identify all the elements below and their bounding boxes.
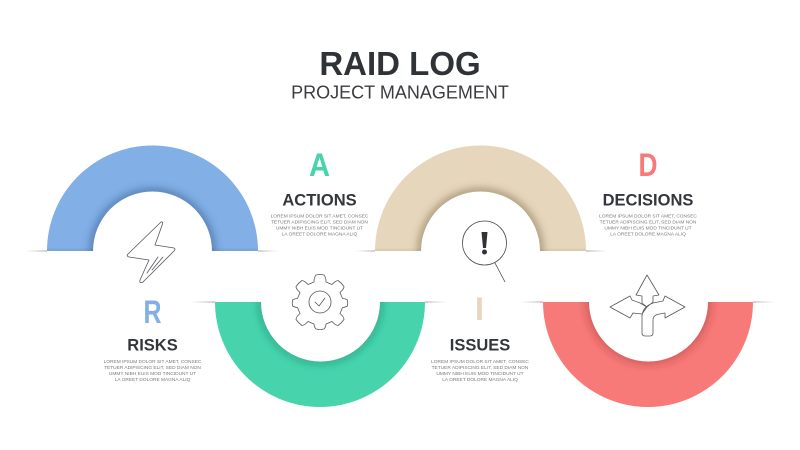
icon: gear with check <box>292 274 348 330</box>
letter: I: I <box>475 291 484 327</box>
letter: A: A <box>309 147 330 183</box>
letter: R: R <box>144 294 162 330</box>
text: issues body: UMMY NIBH EUIS MOD TINCIDUNT UT <box>436 371 524 377</box>
text: risks body: LOREM IPSUM DOLOR SIT AMET, CONSEC <box>104 359 202 365</box>
text: decisions body <box>599 214 697 238</box>
title: RAID LOG <box>319 45 481 82</box>
panel: issues arch <box>357 146 606 252</box>
text: risks body <box>104 359 202 383</box>
text: issues body: LA OREET DOLORE MAGNA ALIQ <box>442 377 518 383</box>
subtitle: PROJECT MANAGEMENT <box>291 82 509 102</box>
text: risks body: LA OREET DOLORE MAGNA ALIQ <box>115 377 191 383</box>
heading: decisions: DECISIONS <box>603 192 693 210</box>
letter: D: D <box>638 147 658 183</box>
heading: risks: RISKS <box>127 336 178 354</box>
heading: issues: ISSUES <box>450 336 510 354</box>
text: issues body <box>431 359 529 383</box>
text: actions body: LOREM IPSUM DOLOR SIT AMET, CONSEC <box>271 214 369 220</box>
panel: decisions arch <box>522 302 773 407</box>
title <box>291 45 509 102</box>
text: actions body <box>271 214 369 238</box>
text: risks body: TETUER ADIPISCING ELIT, SED DIAM NON <box>104 365 201 371</box>
text: actions body: TETUER ADIPISCING ELIT, SED DIAM NON <box>271 220 368 226</box>
text: actions body: LA OREET DOLORE MAGNA ALIQ <box>282 232 358 238</box>
icon: magnifier with exclamation <box>462 221 506 282</box>
icon: lightning bolt <box>127 222 175 283</box>
text: risks body: UMMY NIBH EUIS MOD TINCIDUNT UT <box>109 371 196 377</box>
panel: risks arch <box>27 146 276 252</box>
panel: actions arch <box>192 302 445 407</box>
text: decisions body: LOREM IPSUM DOLOR SIT AMET, CONSEC <box>599 214 697 220</box>
text: decisions body: UMMY NIBH EUIS MOD TINCIDUNT UT <box>604 226 692 232</box>
text: decisions body: TETUER ADIPISCING ELIT, SED DIAM NON <box>600 220 697 226</box>
text: actions body: UMMY NIBH EUIS MOD TINCIDUNT UT <box>276 226 363 232</box>
text: decisions body: LA OREET DOLORE MAGNA ALIQ <box>610 232 686 238</box>
text: issues body: LOREM IPSUM DOLOR SIT AMET, CONSEC <box>431 359 529 365</box>
text: issues body: TETUER ADIPISCING ELIT, SED DIAM NON <box>432 365 529 371</box>
heading: actions: ACTIONS <box>282 192 357 210</box>
icon: three-way arrows <box>610 275 685 336</box>
